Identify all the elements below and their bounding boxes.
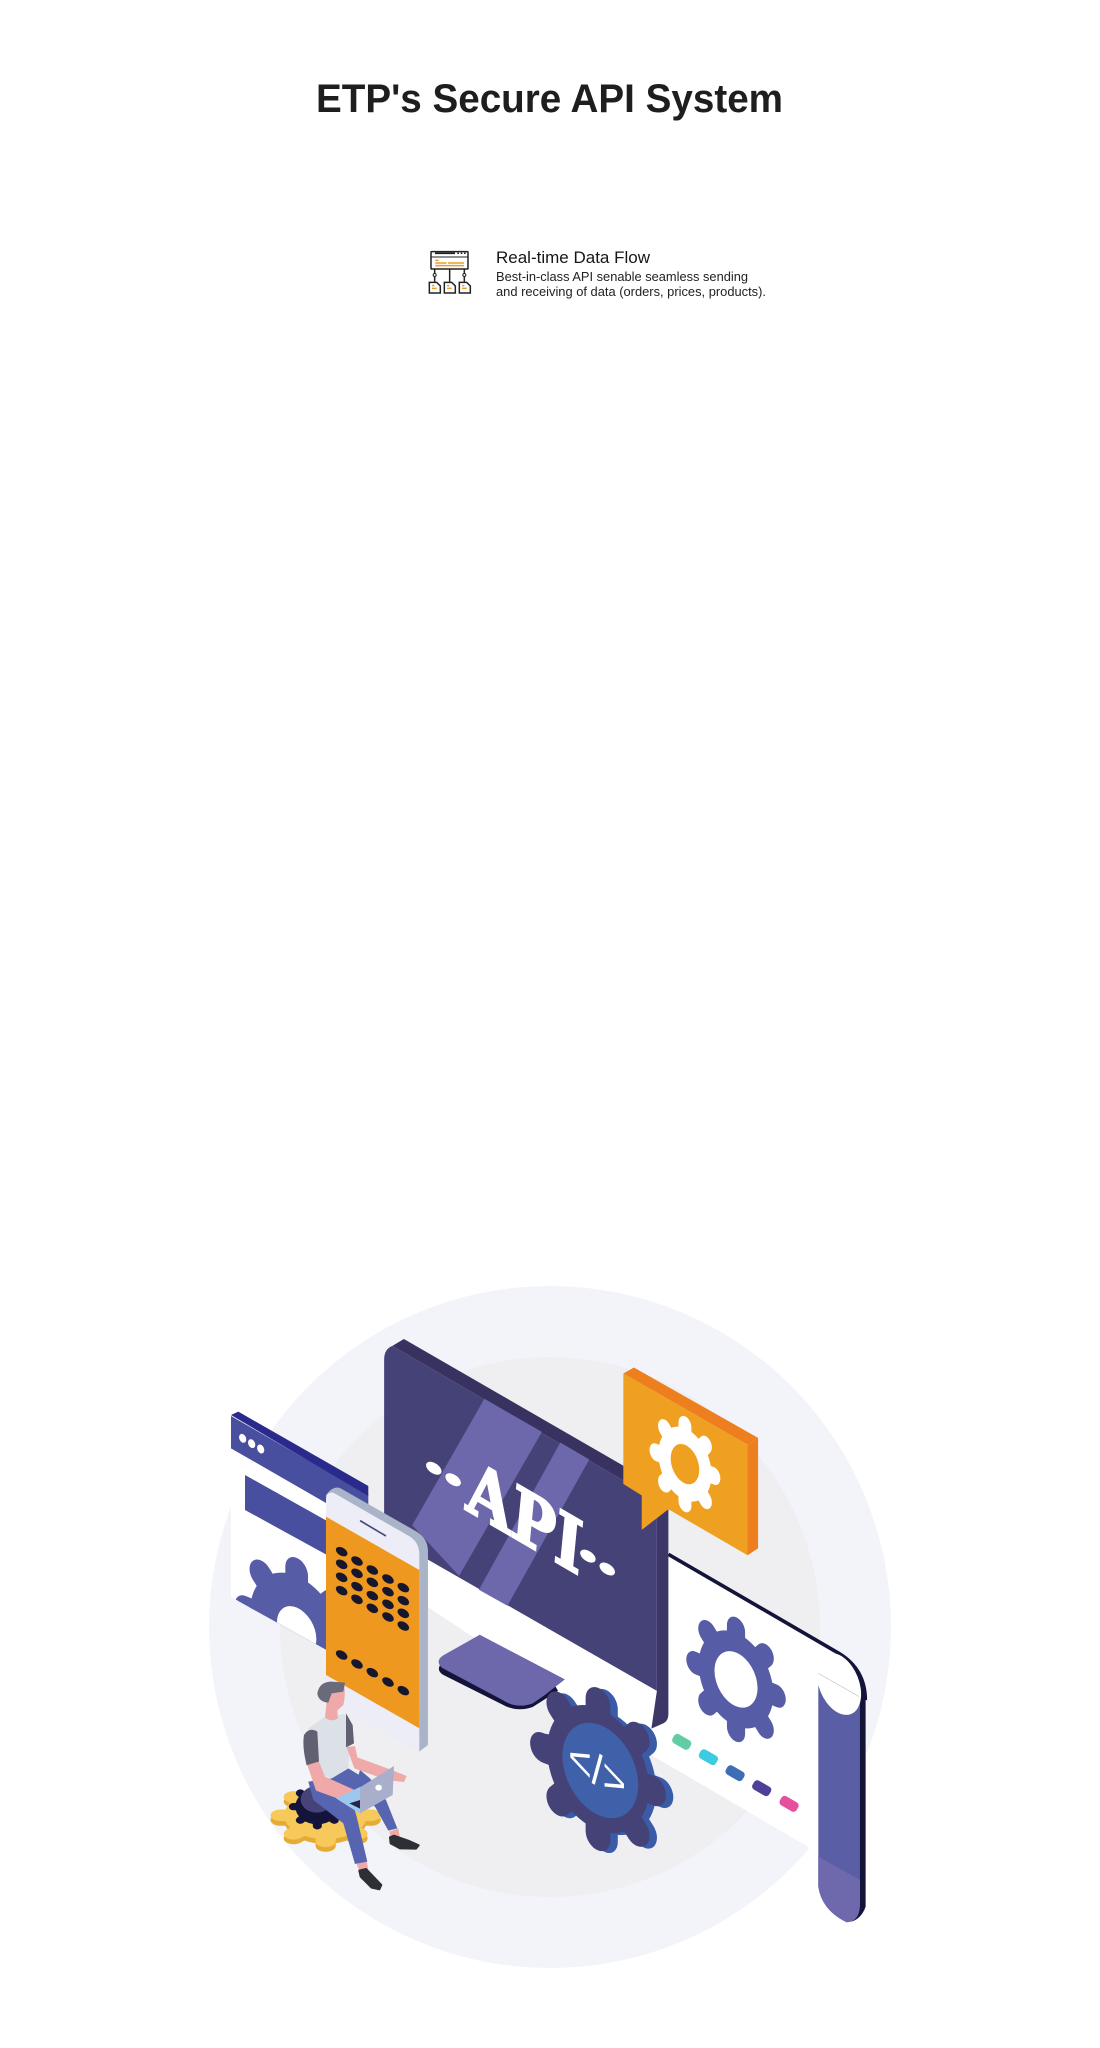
monitor stand: [439, 1635, 565, 1709]
scroll roll: [808, 1647, 870, 1922]
sheet gear: [695, 1612, 777, 1747]
monitor frame: [384, 1339, 668, 1729]
icon: white gear: [656, 1413, 714, 1515]
code symbol: </>: [568, 1727, 626, 1812]
arms: [307, 1746, 407, 1802]
head: [317, 1682, 345, 1720]
laptop: [336, 1766, 394, 1814]
torso: [308, 1714, 350, 1778]
background circles: [209, 1286, 891, 1968]
illustration: API system: [209, 1286, 891, 1968]
orange settings speech bubble: [623, 1368, 758, 1555]
screen label: API: API: [463, 1442, 586, 1593]
monitor: [384, 1339, 668, 1729]
feature description: [496, 270, 766, 299]
feature description: Best-in-class API senable seamless sending: [496, 270, 748, 284]
icon: data flow window with documents: [429, 252, 470, 293]
smartphone: [326, 1487, 428, 1753]
code gear: [542, 1681, 661, 1859]
far leg and shoe: [353, 1770, 419, 1849]
screen stripes: [412, 1399, 589, 1606]
white code sheet with roll: [426, 1552, 870, 1922]
feature heading: Real-time Data Flow: [496, 249, 650, 267]
left browser window: [231, 1412, 368, 1650]
colour swatches: [671, 1733, 800, 1813]
near leg and shoe: [308, 1768, 381, 1889]
title: ETP's Secure API System: [316, 77, 783, 121]
feature description: and receiving of data (orders, prices, products).: [496, 285, 766, 299]
yellow gear seat: [262, 1778, 389, 1857]
feature: real-time data flow: [429, 249, 766, 299]
screen dashes: [424, 1459, 617, 1578]
sleeves: [303, 1713, 354, 1765]
keypad dots: [334, 1545, 411, 1697]
person with laptop on gear: [262, 1682, 419, 1889]
